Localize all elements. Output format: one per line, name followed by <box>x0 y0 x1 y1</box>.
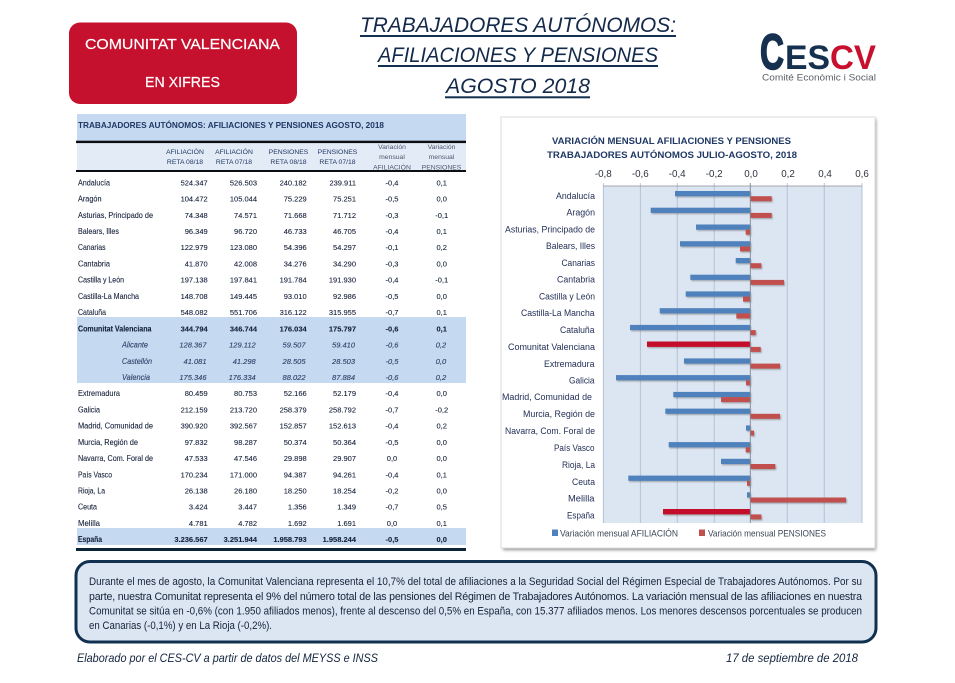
category labels: Castilla y León <box>539 291 595 302</box>
row: Cataluña <box>78 308 447 317</box>
category labels: Balears, Illes <box>546 241 595 252</box>
row: Murcia: 50.374 <box>284 438 307 447</box>
row: Andalucía: 239.911 <box>329 178 356 187</box>
row: Ceuta: -0,7 <box>386 503 398 512</box>
row: Comunitat Valenciana: -0,6 <box>386 324 398 333</box>
row: Cataluña: Cataluña <box>78 308 106 317</box>
row: Aragón <box>78 195 447 204</box>
row: Murcia: 50.364 <box>333 438 356 447</box>
row: Andalucía: -0,4 <box>386 178 398 187</box>
row: Extremadura: Extremadura <box>78 389 121 398</box>
table column headers: RETA 07/18 <box>216 159 252 166</box>
summary text box: en Canarias (-0,1%) y en La Rioja (-0,2%). <box>89 620 272 632</box>
axis labels: 0,2 <box>781 169 795 180</box>
row: Valencia: 175.346 <box>179 373 207 382</box>
row: España: 1.958.793 <box>273 535 307 544</box>
row: Valencia <box>122 373 447 382</box>
logo: CES-CV: Comité Econòmic i Social <box>762 72 876 84</box>
row: Asturias: Asturias, Principado de <box>78 211 154 220</box>
row: Andalucía <box>78 178 447 187</box>
row: Melilla: 1.692 <box>288 519 307 528</box>
badge: Comunitat Valenciana en xifres: EN XIFRES <box>145 74 220 91</box>
row: Alicante: 59.410 <box>332 340 356 350</box>
row: Melilla: 1.691 <box>337 519 356 528</box>
category labels: Canarias <box>562 258 595 269</box>
category labels: Aragón <box>566 208 595 219</box>
row: Galicia <box>78 405 448 414</box>
category labels: País Vasco <box>554 443 594 454</box>
row: Valencia: 87.884 <box>332 373 355 382</box>
row: Comunitat Valenciana: 346.744 <box>230 324 258 333</box>
row: Canarias: 122.979 <box>181 243 208 252</box>
row: Cantabria: 34.276 <box>284 260 307 268</box>
zero axis <box>749 183 751 523</box>
row: España: España <box>78 535 102 544</box>
row: Madrid: 0,2 <box>436 422 447 431</box>
table column headers: PENSIONES <box>269 149 309 156</box>
row: Balears: Balears, Illes <box>78 227 119 236</box>
row: País Vasco: 0,1 <box>436 470 447 479</box>
category labels: Melilla <box>568 494 595 504</box>
row: Ceuta: 0,5 <box>436 503 447 512</box>
table column headers: AFILIACIÓN <box>373 162 411 172</box>
highlight band: Comunitat Valenciana <box>77 317 466 383</box>
table column headers <box>76 141 466 172</box>
axis labels: -0,4 <box>669 169 686 180</box>
category labels: España <box>567 510 595 522</box>
row: Navarra: 47.533 <box>185 454 208 463</box>
row: Castellón: 0,0 <box>436 357 447 366</box>
table column headers: AFILIACIÓN <box>166 147 204 156</box>
row: Ceuta: 1.349 <box>337 503 356 512</box>
category labels: Murcia, Región de <box>523 409 595 420</box>
row: Balears: 96.349 <box>185 227 208 236</box>
footer: source: Elaborado por el CES-CV a partir de datos del MEYSS e INSS <box>77 652 378 665</box>
row: Canarias: 123.080 <box>230 243 257 252</box>
row: Asturias: 74.348 <box>185 211 208 220</box>
axis labels: 0,4 <box>818 169 832 180</box>
row: Navarra: 29.898 <box>284 454 307 463</box>
row: Alicante: Alicante <box>121 340 148 350</box>
row: Castilla-La Mancha: 148.708 <box>181 292 208 301</box>
category labels <box>502 191 596 522</box>
row: Aragón: 104.472 <box>181 195 208 204</box>
category labels: Rioja, La <box>562 460 596 471</box>
row: Cantabria: 0,0 <box>436 260 447 268</box>
row: Castilla y León: 197.841 <box>230 276 257 285</box>
row: Cantabria: 42.008 <box>234 260 257 268</box>
row: Castilla y León: 191.784 <box>280 276 307 285</box>
row: País Vasco: 171.000 <box>230 470 257 479</box>
row: Rioja: -0,2 <box>386 486 398 496</box>
row: Castilla-La Mancha: 0,0 <box>436 292 447 301</box>
table title band <box>77 114 466 141</box>
logo: CES-CV: CV <box>830 39 876 77</box>
highlight band: España <box>77 528 466 545</box>
row: Galicia: -0,7 <box>386 405 398 414</box>
row: Comunitat Valenciana: 175.797 <box>329 324 356 333</box>
row: Murcia: 0,0 <box>436 438 447 447</box>
row: Rioja: Rioja, La <box>78 486 105 496</box>
axis labels: -0,6 <box>632 169 649 180</box>
category labels: Extremadura <box>544 359 595 370</box>
logo: CES-CV <box>760 24 876 84</box>
title: AGOSTO 2018 <box>444 74 590 98</box>
row: Galicia: 258.379 <box>280 405 307 414</box>
row: Extremadura: 0,0 <box>436 389 447 398</box>
row: Murcia: -0,5 <box>386 438 398 447</box>
data table <box>76 114 466 551</box>
row: Cantabria: 34.290 <box>333 260 356 268</box>
row: Madrid: 152.613 <box>329 422 356 431</box>
row: Cantabria: Cantabria <box>78 260 111 268</box>
axis labels: -0,8 <box>595 169 612 180</box>
row: Castellón: 41.298 <box>233 357 257 366</box>
row: Melilla: 0,0 <box>387 519 397 528</box>
row: País Vasco: 170.234 <box>181 470 208 479</box>
row: Melilla: 4.781 <box>189 519 208 528</box>
row: Navarra: 47.546 <box>234 454 257 463</box>
row: Aragón: 75.251 <box>333 195 356 204</box>
row: Asturias: -0,1 <box>435 211 448 220</box>
category labels: Madrid, Comunidad de <box>502 392 592 403</box>
row: Cataluña: 315.955 <box>329 308 356 317</box>
axis labels: -0,2 <box>706 169 723 180</box>
title: TRABAJADORES AUTÓNOMOS: <box>360 12 676 37</box>
row: Ceuta: 3.424 <box>189 503 208 512</box>
row: Castilla-La Mancha <box>78 292 447 301</box>
row: Asturias: -0,3 <box>386 211 398 220</box>
row: Cantabria: 41.870 <box>185 260 208 268</box>
legend <box>552 528 826 538</box>
summary text box: parte, nuestra Comunitat representa el 9% del número total de las pensiones del Régimen de Trabajadores Autónomos. La variación mensual de las afiliaciones en nuestra <box>89 591 862 603</box>
row: Valencia: 88.022 <box>283 373 306 382</box>
row: Balears: 46.705 <box>333 227 356 236</box>
row: Galicia: 212.159 <box>181 405 208 414</box>
row: Canarias: 54.396 <box>284 243 307 252</box>
row: Murcia: 98.287 <box>234 438 257 447</box>
axis labels: 0,6 <box>855 169 869 180</box>
row: Aragón: 0,0 <box>436 195 447 204</box>
category labels: Ceuta <box>572 477 596 488</box>
row: Castilla y León: Castilla y León <box>78 276 124 285</box>
row: Valencia: 176.334 <box>229 373 256 382</box>
row: Castellón: -0,5 <box>386 357 399 366</box>
row: Andalucía: 524.347 <box>181 178 208 187</box>
footer: date: 17 de septiembre de 2018 <box>726 652 859 665</box>
row: Madrid: 152.857 <box>280 422 307 431</box>
category labels: Castilla-La Mancha <box>521 308 595 319</box>
table column headers: RETA 07/18 <box>319 159 356 166</box>
row: Madrid: 390.920 <box>181 422 208 431</box>
row: Extremadura: -0,4 <box>386 389 398 398</box>
row: Navarra: 29.907 <box>333 454 356 463</box>
row: Alicante: 0,2 <box>436 340 447 350</box>
category labels: Cataluña <box>560 325 595 336</box>
summary text box: Durante el mes de agosto, la Comunitat Valenciana representa el 10,7% del total de afiliaciones a la Seguridad Social del Régimen Especial de Trabajadores Autónomos. Por su <box>89 576 862 588</box>
row: Andalucía: 526.503 <box>230 178 257 187</box>
row: Asturias <box>78 211 448 220</box>
row: Castilla y León: -0,1 <box>435 276 448 285</box>
row: Asturias: 74.571 <box>234 211 257 220</box>
chart title: TRABAJADORES AUTÓNOMOS JULIO-AGOSTO, 2018 <box>547 149 798 161</box>
table column headers: AFILIACIÓN <box>215 147 253 156</box>
row: Galicia: -0,2 <box>435 405 448 414</box>
row: Aragón: 75.229 <box>284 195 307 204</box>
row: Asturias: 71.668 <box>284 211 307 220</box>
row: Rioja: 26.138 <box>185 486 208 496</box>
legend: Variación mensual PENSIONES <box>708 528 826 538</box>
row: Cataluña: 316.122 <box>280 308 307 317</box>
row: Aragón: Aragón <box>78 195 102 204</box>
row: España: 0,0 <box>436 535 447 544</box>
category labels: Comunitat Valenciana <box>508 342 596 353</box>
legend: Variación mensual AFILIACIÓN <box>560 528 678 538</box>
row: Rioja: 0,0 <box>436 486 447 496</box>
row: Rioja: 26.180 <box>234 486 257 496</box>
row: Comunitat Valenciana: 176.034 <box>280 324 308 333</box>
row: Ceuta: 1.356 <box>288 503 307 512</box>
table column headers: PENSIONES <box>318 149 358 156</box>
category labels: Andalucía <box>556 191 596 202</box>
row: Andalucía: 240.182 <box>280 178 307 187</box>
category labels: Cantabria <box>557 275 596 286</box>
panel: bar chart <box>501 117 876 550</box>
row: Alicante: 128.367 <box>179 340 207 350</box>
row: Balears <box>78 227 447 236</box>
row: Castellón: Castellón <box>122 357 152 366</box>
row: Galicia: 258.792 <box>329 405 356 414</box>
chart title <box>547 135 798 161</box>
row: País Vasco: 94.387 <box>284 470 307 479</box>
badge: Comunitat Valenciana en xifres: COMUNITAT VALENCIANA <box>85 36 280 53</box>
row: Castilla y León: 197.138 <box>181 276 208 285</box>
title: AFILIACIONES Y PENSIONES <box>376 43 659 67</box>
row: Alicante: 59.507 <box>283 340 306 350</box>
table column headers: mensual <box>429 154 455 161</box>
row: Extremadura: 80.459 <box>185 389 208 398</box>
row: Comunitat Valenciana: 344.794 <box>181 324 209 333</box>
row: Alicante: 129.112 <box>229 340 257 350</box>
row: Valencia: -0,6 <box>386 373 399 382</box>
row: Ceuta: 3.447 <box>238 503 257 512</box>
row: Alicante: -0,6 <box>386 340 399 350</box>
row: Melilla: 4.782 <box>238 519 257 528</box>
row: Cataluña: 551.706 <box>230 308 257 317</box>
table column headers: RETA 08/18 <box>270 159 307 166</box>
row: Melilla: 0,1 <box>436 519 447 528</box>
row: Comunitat Valenciana <box>78 324 447 333</box>
row: Cantabria: -0,3 <box>386 260 398 268</box>
table column headers: Variación <box>378 144 406 151</box>
row: País Vasco: 94.261 <box>333 470 356 479</box>
row: Castilla y León <box>78 276 448 285</box>
table column headers: mensual <box>379 154 405 161</box>
row: España: -0,5 <box>386 535 398 544</box>
table title band: TRABAJADORES AUTÓNOMOS: AFILIACIONES Y PENSIONES AGOSTO, 2018 <box>78 119 384 130</box>
row: Cataluña: -0,7 <box>386 308 398 317</box>
table column headers: Variación <box>428 144 456 151</box>
summary text box: Comunitat se sitúa en -0,6% (con 1.950 afiliados menos), frente al descenso del 0,5% en España, con 15.377 afiliados menos. Los menores descensos porcentuales se producen <box>89 606 862 618</box>
row: Melilla <box>78 519 447 528</box>
row: Castilla-La Mancha: -0,5 <box>386 292 398 301</box>
category labels: Asturias, Principado de <box>505 224 595 236</box>
row: Madrid: 392.567 <box>230 422 257 431</box>
axis labels <box>595 169 869 180</box>
row: España: 3.236.567 <box>174 535 208 544</box>
row: Andalucía: Andalucía <box>78 178 110 187</box>
row: Asturias: 71.712 <box>333 211 356 220</box>
row: Murcia <box>78 438 447 447</box>
row: Alicante <box>121 340 447 350</box>
row: Madrid <box>78 422 447 431</box>
row: Castilla-La Mancha: Castilla-La Mancha <box>78 292 139 301</box>
row: Extremadura: 52.166 <box>284 389 307 398</box>
row: Extremadura <box>78 389 447 398</box>
row: Balears: 96.720 <box>234 227 257 236</box>
row: País Vasco <box>78 470 447 479</box>
row: Ceuta: Ceuta <box>78 503 97 512</box>
row: Navarra: Navarra, Com. Foral de <box>78 454 153 463</box>
row: Andalucía: 0,1 <box>436 178 447 187</box>
row: Extremadura: 52.179 <box>333 389 356 398</box>
badge: Comunitat Valenciana en xifres <box>69 22 297 104</box>
row: Comunitat Valenciana: 0,1 <box>436 324 447 333</box>
row: Navarra <box>78 454 447 463</box>
row: Madrid: -0,4 <box>386 422 398 431</box>
row: Extremadura: 80.753 <box>234 389 257 398</box>
row: Murcia: 97.832 <box>185 438 208 447</box>
row: Galicia: 213.720 <box>230 405 257 414</box>
row: Castilla-La Mancha: 92.986 <box>333 292 356 301</box>
row: Comunitat Valenciana: Comunitat Valenciana <box>78 324 152 333</box>
row: España: 3.251.944 <box>224 535 258 544</box>
category labels: Navarra, Com. Foral de <box>505 426 595 437</box>
row: Castilla-La Mancha: 93.010 <box>284 292 307 301</box>
table column headers: RETA 08/18 <box>167 159 203 166</box>
row: Canarias: 54.297 <box>333 243 356 252</box>
chart title: VARIACIÓN MENSUAL AFILIACIONES Y PENSIONES <box>552 135 792 147</box>
row: Rioja: 18.254 <box>333 486 356 496</box>
row: Castellón <box>122 357 447 366</box>
row: Canarias <box>78 243 447 252</box>
row: Ceuta <box>78 503 447 512</box>
bars: variación mensual afiliación y pensiones <box>616 191 846 519</box>
row: Balears: 46.733 <box>284 227 307 236</box>
plot background and grid <box>603 183 862 523</box>
row: Navarra: 0,0 <box>387 454 397 463</box>
summary text box <box>76 562 876 642</box>
category labels: Galicia <box>569 376 595 386</box>
row: Castellón: 28.503 <box>331 357 356 366</box>
row: Aragón: -0,5 <box>386 195 398 204</box>
row: Castellón: 41.081 <box>184 357 206 366</box>
axis labels: 0,0 <box>744 169 758 180</box>
logo: CES-CV: C <box>760 24 784 80</box>
row: Castilla-La Mancha: 149.445 <box>230 292 257 301</box>
row: Castilla y León: -0,4 <box>386 276 398 285</box>
row: Murcia: Murcia, Región de <box>78 438 139 447</box>
row: País Vasco: País Vasco <box>78 470 112 479</box>
row: Canarias: -0,1 <box>386 243 398 252</box>
row: País Vasco: -0,4 <box>386 470 398 479</box>
row: Balears: -0,4 <box>386 227 398 236</box>
row: Cantabria <box>78 260 447 268</box>
title <box>360 12 676 98</box>
row: Canarias: 0,2 <box>436 243 447 252</box>
row: Castellón: 28.505 <box>282 357 306 366</box>
row: Balears: 0,1 <box>436 227 447 236</box>
row: Valencia: Valencia <box>122 373 151 382</box>
row: Melilla: Melilla <box>78 519 101 528</box>
row: España <box>78 535 447 544</box>
row: Rioja <box>78 486 447 496</box>
row: España: 1.958.244 <box>323 535 357 544</box>
row: Canarias: Canarias <box>78 243 106 252</box>
row: Cataluña: 548.082 <box>181 308 208 317</box>
row: Valencia: 0,2 <box>436 373 447 382</box>
row: Aragón: 105.044 <box>230 195 257 204</box>
row: Rioja: 18.250 <box>284 486 307 496</box>
table column headers: PENSIONES <box>422 164 462 172</box>
row: Madrid: Madrid, Comunidad de <box>78 422 154 431</box>
logo: CES-CV: ES <box>785 39 830 77</box>
row: Navarra: 0,0 <box>436 454 447 463</box>
row: Cataluña: 0,1 <box>436 308 447 317</box>
row: Galicia: Galicia <box>78 405 100 414</box>
row: Castilla y León: 191.930 <box>329 276 356 285</box>
